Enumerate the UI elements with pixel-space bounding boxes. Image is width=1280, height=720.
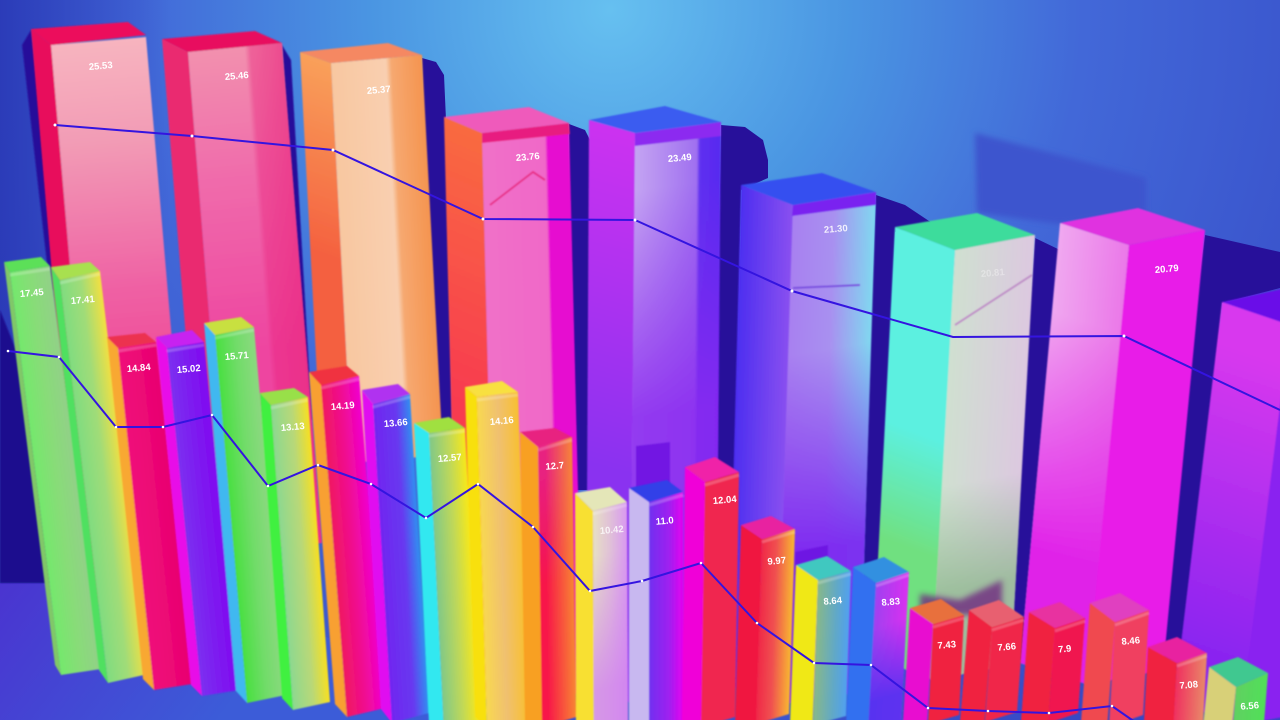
- front bar value labels: 17.45: [19, 287, 45, 300]
- front trend line: [7, 350, 1135, 720]
- back bar value labels: 21.30: [824, 223, 848, 236]
- front bar 11.0: [629, 480, 683, 720]
- front bar value labels: 12.7: [545, 460, 564, 473]
- front bar value labels: 6.56: [1240, 700, 1259, 713]
- front bar 7.08: [1144, 637, 1207, 720]
- front bar 12.57: [414, 417, 480, 720]
- front bar value labels: 7.66: [997, 641, 1016, 654]
- front bar value labels: 7.9: [1058, 643, 1072, 656]
- back bar value labels: 20.79: [1154, 263, 1179, 276]
- front bar 7.9: [1021, 602, 1085, 720]
- back bar 25.46: [162, 31, 322, 552]
- front bar 10.42: [575, 487, 628, 720]
- front bar value labels: 7.08: [1179, 679, 1198, 692]
- front bar 9.97: [735, 516, 795, 720]
- back bar 21.30: [728, 173, 876, 705]
- front bar value labels: 12.57: [437, 452, 462, 465]
- front bar value labels: 10.42: [599, 524, 624, 537]
- front bar 14.19: [309, 366, 385, 717]
- floor: [0, 583, 520, 720]
- back bar value labels: 25.46: [224, 70, 249, 83]
- front bar 8.83: [846, 557, 909, 720]
- front bar value labels: 14.19: [330, 400, 355, 413]
- panel: front row of bars: [4, 257, 1268, 720]
- front bar value labels: 8.83: [881, 596, 900, 609]
- back bar 23.49: [586, 106, 721, 703]
- front bar 14.84: [107, 333, 192, 690]
- back bar value labels: [88, 60, 1179, 280]
- back bar value labels: 23.49: [667, 152, 692, 165]
- front bar value labels: 13.13: [280, 421, 305, 434]
- front bar 6.56: [1203, 657, 1268, 720]
- front bar value labels: 15.02: [176, 363, 201, 376]
- back bar value labels: 25.37: [366, 84, 391, 97]
- front bar value labels: 13.66: [383, 417, 408, 430]
- front bar 7.66: [960, 600, 1024, 720]
- back bar 25.53: [31, 22, 194, 605]
- front bar 13.13: [260, 388, 330, 710]
- front bar value labels: 12.04: [712, 494, 738, 507]
- back bar far right: [1174, 285, 1280, 720]
- front bar 12.7: [520, 428, 576, 720]
- back bar 20.79: [1020, 208, 1205, 685]
- front bar value labels: 15.71: [224, 350, 250, 363]
- back bar faint label: [873, 213, 1035, 680]
- front bar 8.64: [790, 556, 851, 720]
- front bar 7.43: [903, 599, 964, 720]
- back bar value labels: 25.53: [88, 60, 113, 73]
- front bar 13.66: [362, 384, 429, 720]
- front bar 17.41: [51, 262, 148, 683]
- front bar value labels: 8.46: [1121, 635, 1140, 648]
- front bar value labels: 7.43: [937, 639, 956, 652]
- front bar value labels: 11.0: [655, 515, 674, 528]
- front bar value labels: [19, 287, 1259, 713]
- front bar 15.71: [204, 317, 286, 703]
- front bar value labels: 14.84: [126, 362, 152, 375]
- front bar 8.46: [1081, 593, 1149, 720]
- front bar 14.16: [465, 381, 528, 720]
- back bar 25.37: [300, 43, 443, 463]
- front bar 15.02: [156, 330, 239, 696]
- front bar value labels: 14.16: [489, 415, 514, 428]
- back bar 23.76: [444, 107, 583, 703]
- back bar value labels: 23.76: [515, 151, 540, 164]
- front bar 12.04: [682, 457, 739, 720]
- back bar value labels: 20.81: [980, 267, 1006, 280]
- front bar value labels: 17.41: [70, 294, 96, 307]
- back trend line: [54, 124, 1280, 410]
- front bar value labels: 8.64: [823, 595, 843, 608]
- front bar 17.45: [4, 257, 101, 675]
- front bar value labels: 9.97: [767, 555, 786, 568]
